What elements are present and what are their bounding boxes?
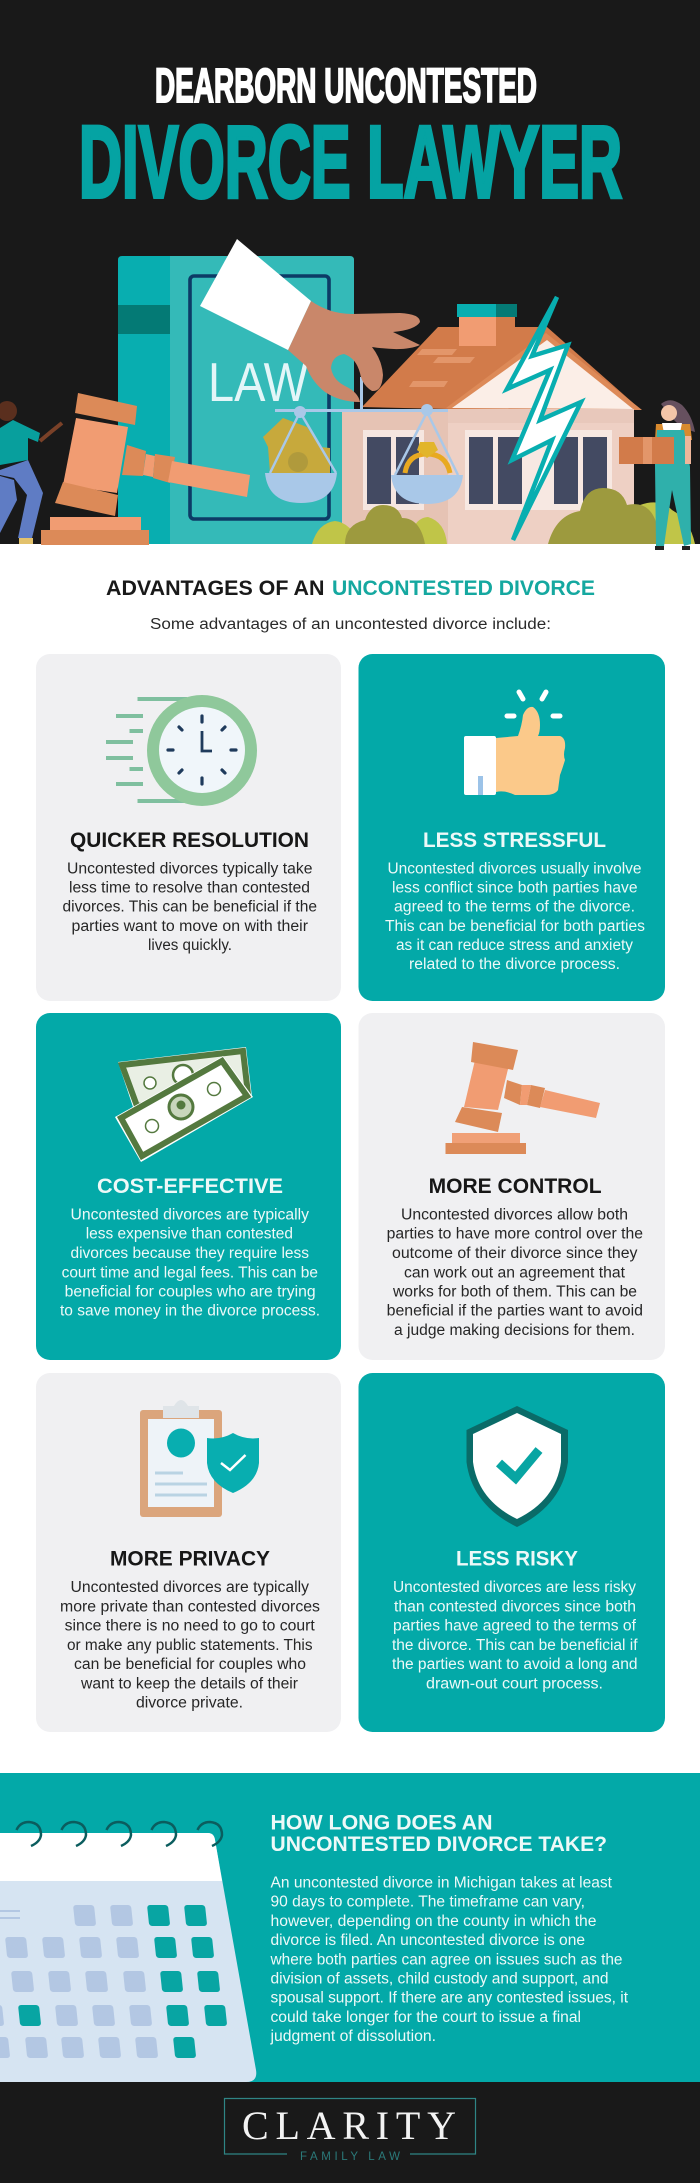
body text: parties want to move on with their — [72, 918, 308, 935]
body text: outcome of their divorce since they — [392, 1245, 638, 1262]
heading — [270, 1810, 607, 1856]
body text: division of assets, child custody and support, and — [270, 1970, 608, 1987]
body text: judgment of dissolution. — [269, 2028, 436, 2045]
body text: related to the divorce process. — [409, 956, 620, 973]
body text: beneficial for couples who are trying — [65, 1284, 316, 1301]
logo: FAMILY LAW — [300, 2151, 400, 2163]
icon: thumbs up — [464, 692, 565, 795]
body text — [392, 1579, 638, 1692]
body text: Uncontested divorces are typically — [70, 1206, 309, 1223]
body text: however, depending on the county in which the — [270, 1913, 596, 1930]
calendar rings — [16, 1822, 222, 1846]
body text: divorces. This can be beneficial if the — [62, 899, 317, 916]
heading: LESS RISKY — [456, 1546, 578, 1570]
body text: the divorce. This can be beneficial if — [392, 1637, 638, 1654]
section heading: UNCONTESTED DIVORCE — [332, 576, 595, 600]
section heading — [106, 576, 595, 600]
section intro text: Some advantages of an uncontested divorce include: — [150, 616, 551, 633]
body text: Uncontested divorces usually involve — [388, 860, 642, 877]
body text: beneficial if the parties want to avoid — [387, 1303, 643, 1320]
body text: This can be beneficial for both parties — [385, 918, 645, 935]
heading: MORE PRIVACY — [110, 1546, 270, 1570]
body text: the parties want to avoid a long and — [392, 1656, 638, 1673]
body text: less expensive than contested — [86, 1226, 293, 1243]
panel: how long does it take — [0, 1773, 700, 2082]
heading: UNCONTESTED DIVORCE TAKE? — [270, 1832, 607, 1856]
body text: Uncontested divorces allow both — [401, 1206, 628, 1223]
body text — [385, 860, 645, 973]
body text: parties to have more control over the — [387, 1226, 643, 1243]
body text: parties have agreed to the terms of — [393, 1618, 637, 1635]
icon: shield with check — [466, 1406, 568, 1527]
icon: gavel — [446, 1042, 600, 1154]
panel: less risky — [358, 1373, 665, 1732]
body text: or make any public statements. This — [67, 1637, 313, 1654]
body text: An uncontested divorce in Michigan takes at least — [270, 1874, 613, 1891]
heading: QUICKER RESOLUTION — [70, 828, 309, 852]
body text: Uncontested divorces are typically — [70, 1579, 309, 1596]
body text: agreed to the terms of the divorce. — [394, 899, 635, 916]
body text: divorce private. — [136, 1695, 243, 1712]
logo: CLARITY — [242, 2103, 456, 2148]
body text: a judge making decisions for them. — [394, 1322, 635, 1339]
body text: less conflict since both parties have — [392, 880, 638, 897]
body text: divorces because they require less — [70, 1245, 309, 1262]
panel: quicker resolution — [36, 654, 341, 1001]
body text — [269, 1874, 629, 2045]
illustration: scales of justice — [263, 377, 463, 504]
illustration: woman with box — [619, 400, 695, 550]
illustration: house — [342, 304, 642, 544]
body text: spousal support. If there are any contested issues, it — [270, 1990, 629, 2007]
illustration: bushes — [312, 488, 695, 544]
body text: can work out an agreement that — [404, 1264, 626, 1281]
body text: 90 days to complete. The timeframe can vary, — [270, 1894, 585, 1911]
body text: could take longer for the court to issue a final — [270, 2009, 581, 2026]
body text — [60, 1206, 320, 1320]
illustration: lightning bolt — [507, 297, 581, 540]
illustration: law book: LAW — [208, 351, 308, 413]
panel: more privacy — [36, 1373, 341, 1732]
body text — [387, 1206, 643, 1339]
footer — [0, 2082, 700, 2183]
body text — [60, 1579, 320, 1712]
section heading: ADVANTAGES OF AN — [106, 576, 324, 600]
hero panel — [0, 0, 700, 550]
body text — [62, 860, 317, 954]
illustration: law book — [118, 256, 354, 544]
icon: clock — [106, 695, 257, 806]
panel: more control — [358, 1013, 665, 1360]
illustration: gavel — [41, 393, 250, 545]
icon: clipboard with shield — [140, 1400, 259, 1517]
body text: divorce is filed. An uncontested divorce is one — [270, 1932, 585, 1949]
icon: ring — [405, 454, 450, 473]
body text: court time and legal fees. This can be — [62, 1264, 318, 1281]
body text: to save money in the divorce process. — [60, 1303, 320, 1320]
body text: Uncontested divorces typically take — [67, 860, 312, 877]
body text: than contested divorces since both — [394, 1598, 636, 1615]
body text: since there is no need to go to court — [65, 1618, 315, 1635]
calendar day cells — [0, 1905, 158, 2058]
heading: LESS STRESSFUL — [423, 828, 606, 852]
panel: less stressful — [358, 654, 665, 1001]
body text: works for both of them. This can be — [392, 1284, 637, 1301]
body text: Uncontested divorces are less risky — [393, 1579, 636, 1596]
body text: more private than contested divorces — [60, 1598, 320, 1615]
body text: where both parties can agree on issues such as the — [270, 1951, 622, 1968]
heading: HOW LONG DOES AN — [270, 1810, 492, 1834]
logo — [224, 2098, 476, 2163]
body text: less time to resolve than contested — [69, 880, 310, 897]
body text: can be beneficial for couples who — [74, 1656, 306, 1673]
heading: COST-EFFECTIVE — [97, 1174, 283, 1198]
illustration: calendar — [0, 1822, 256, 2082]
body text: as it can reduce stress and anxiety — [396, 937, 633, 954]
icon: dollar bills — [115, 1047, 253, 1162]
body text: drawn-out court process. — [426, 1675, 603, 1692]
illustration: lawyer hand and sleeve — [200, 239, 420, 402]
panel: cost-effective — [36, 1013, 341, 1360]
illustration: person on left — [0, 401, 62, 544]
heading: MORE CONTROL — [429, 1174, 602, 1198]
body text: want to keep the details of their — [80, 1675, 298, 1692]
body text: lives quickly. — [148, 937, 232, 954]
